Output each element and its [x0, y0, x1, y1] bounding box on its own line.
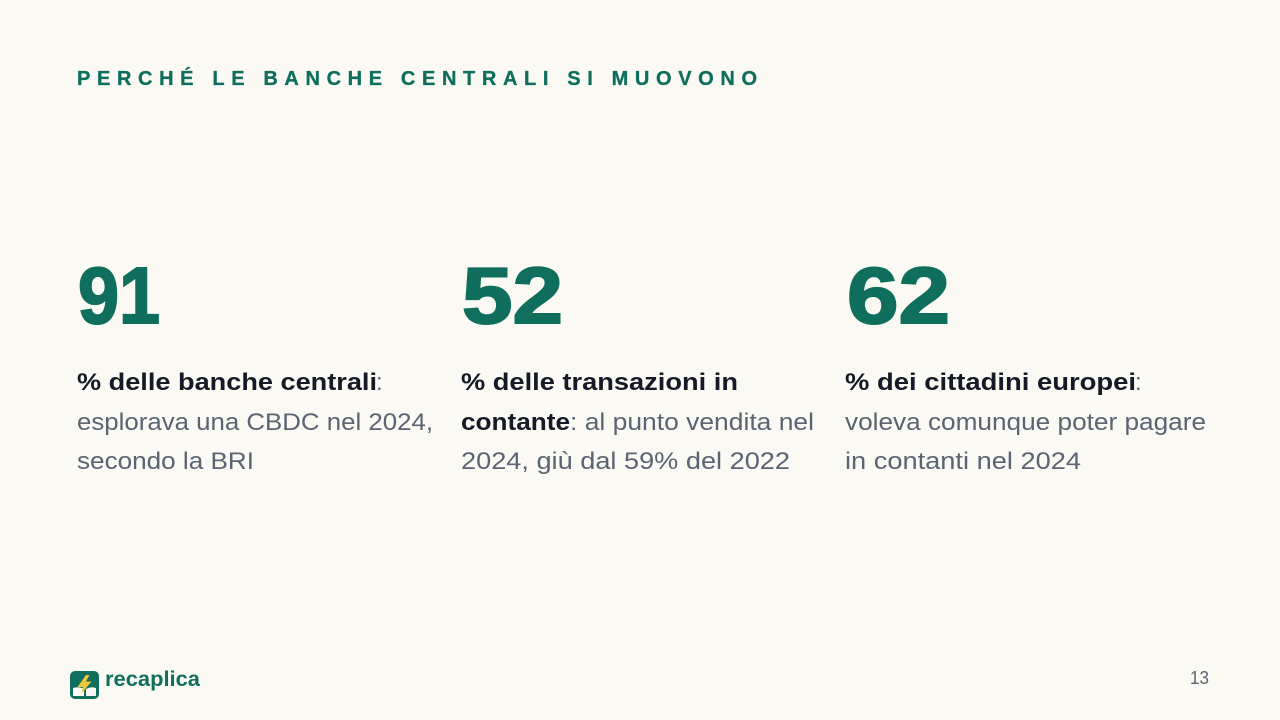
- description: cash transactions: [461, 369, 814, 475]
- icon: lightning bolt over open book: [70, 671, 99, 699]
- number: 62: 62: [847, 251, 950, 340]
- description: central banks: :: [376, 369, 383, 396]
- number: 91: 91: [78, 251, 160, 340]
- description: central banks: [77, 369, 433, 475]
- description: central banks: % delle banche centrali: [77, 369, 377, 396]
- description: central banks: secondo la BRI: [77, 448, 254, 475]
- title: PERCHÉ LE BANCHE CENTRALI SI MUOVONO: [77, 67, 757, 90]
- page number: 13: [1190, 668, 1209, 688]
- description: European citizens: [845, 369, 1206, 475]
- description: European citizens: voleva comunque poter pagare: [845, 409, 1206, 436]
- description: European citizens: :: [1135, 369, 1142, 396]
- panel: European citizens stat: [845, 251, 1206, 475]
- description: cash transactions: contante: [461, 409, 570, 436]
- description: cash transactions: 2024, giù dal 59% del 2022: [461, 448, 790, 475]
- description: cash transactions: : al punto vendita nel: [570, 409, 814, 436]
- number: 52: 52: [462, 251, 563, 340]
- brand name: recaplica: [105, 668, 200, 691]
- panel: central banks stat: [77, 251, 433, 475]
- description: cash transactions: % delle transazioni in: [461, 369, 738, 396]
- description: central banks: esplorava una CBDC nel 2024,: [77, 409, 433, 436]
- description: European citizens: in contanti nel 2024: [845, 448, 1081, 475]
- panel: cash transactions stat: [461, 251, 814, 475]
- logo: [70, 668, 200, 699]
- description: European citizens: % dei cittadini europei: [845, 369, 1136, 396]
